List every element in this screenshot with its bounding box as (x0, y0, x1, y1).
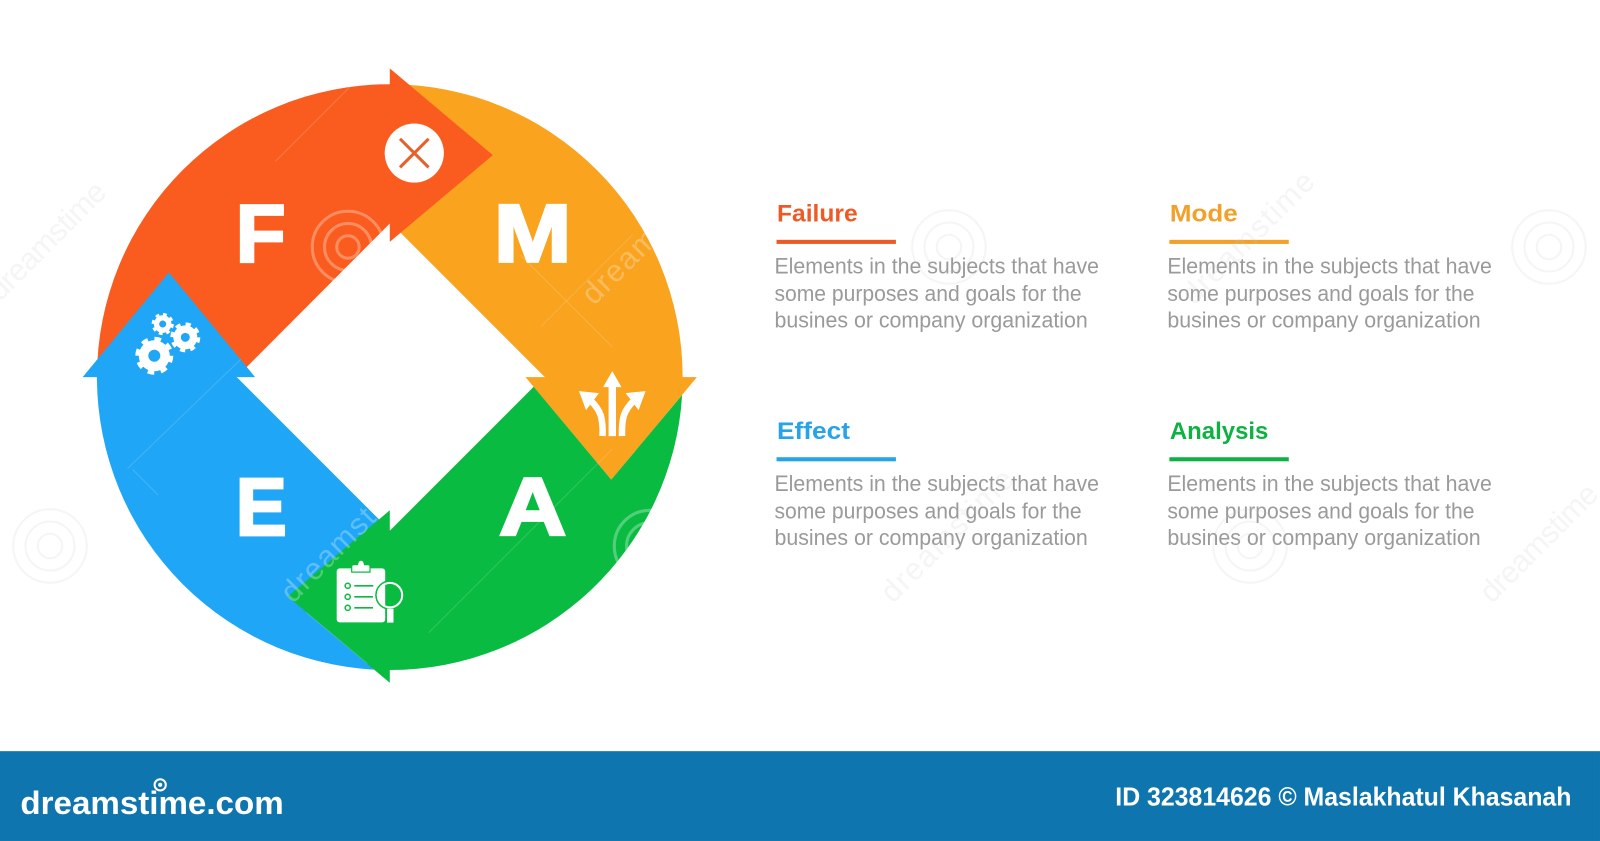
segment: M (orange arrow) (390, 84, 697, 480)
segment: F (red arrow) (97, 68, 493, 377)
watermark: spirals and repeated text: dreamstime (1175, 164, 1321, 311)
legend: Analysis: busines or company organization (1167, 525, 1481, 550)
icon: clipboard with magnifier (337, 560, 404, 623)
legend: Mode: Mode (1170, 200, 1238, 227)
segment: M (orange arrow): M (494, 188, 571, 279)
legend: Failure: busines or company organization (774, 308, 1088, 333)
watermark: spirals and repeated text: dreamstime (874, 462, 1020, 609)
legend: Effect: some purposes and goals for the (774, 498, 1082, 523)
segment: F (red arrow): F (236, 188, 286, 279)
legend: Failure: Elements in the subjects that have (774, 254, 1099, 279)
legend: Failure: some purposes and goals for the (774, 281, 1082, 306)
icon: cross in circle (385, 123, 444, 183)
icon: branching arrows (579, 371, 646, 436)
legend: Analysis: Elements in the subjects that have (1167, 471, 1492, 496)
legend: Effect: Elements in the subjects that have (774, 471, 1099, 496)
legend: Analysis (1167, 418, 1492, 550)
legend: Mode: Elements in the subjects that have (1167, 254, 1492, 279)
legend: Failure (774, 200, 1099, 333)
watermark: spirals and repeated text: dreamstime (575, 164, 721, 311)
footer bar (0, 751, 1600, 841)
segment: E (blue arrow) (83, 273, 390, 670)
segment: A (green arrow) (288, 387, 682, 683)
circular FMEA diagram (83, 68, 697, 683)
footer logo: dreamstime.com (20, 784, 284, 821)
legend: Mode (1167, 200, 1492, 333)
legend: Analysis: Analysis (1170, 418, 1268, 445)
footer image id and author: ID 323814626 © Maslakhatul Khasanah (1115, 783, 1571, 811)
legend: Effect: Effect (777, 418, 850, 445)
segment: E (blue arrow): E (236, 462, 287, 553)
legend: Mode: busines or company organization (1167, 308, 1481, 333)
watermark: spirals and repeated text (0, 87, 1600, 663)
legend: Effect (774, 418, 1099, 550)
legend: Analysis: some purposes and goals for the (1167, 498, 1474, 523)
legend: Effect: busines or company organization (774, 525, 1088, 550)
segment: A (green arrow): A (499, 462, 566, 553)
legend: Mode: some purposes and goals for the (1167, 281, 1474, 306)
icon: gears (138, 314, 198, 372)
legend: Failure: Failure (777, 200, 858, 227)
watermark: spirals and repeated text: dreamstime (274, 462, 420, 609)
